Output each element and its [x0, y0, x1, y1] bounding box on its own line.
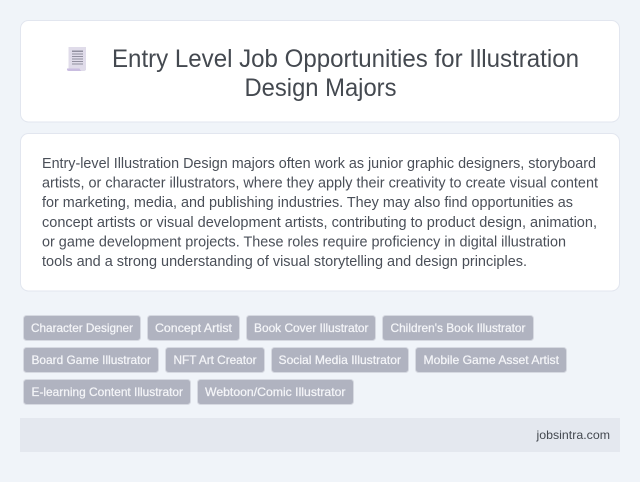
tag: Concept Artist — [148, 316, 240, 340]
description text: concept artists or visual development artists, contributing to product design, animation, — [42, 215, 597, 231]
description text — [42, 156, 598, 270]
tag: Social Media Illustrator — [272, 348, 408, 372]
tag: E-learning Content Illustrator — [24, 380, 190, 404]
tag: Book Cover Illustrator — [246, 316, 376, 340]
title — [112, 45, 579, 102]
tag: Webtoon/Comic Illustrator — [198, 380, 354, 404]
tag: Character Designer: Character Designer — [31, 321, 133, 335]
tag: Webtoon/Comic Illustrator: Webtoon/Comic Illustrator — [205, 385, 346, 399]
footer bar — [20, 418, 620, 452]
job tags — [24, 316, 566, 404]
tag: Character Designer — [24, 316, 140, 340]
tag: NFT Art Creator: NFT Art Creator — [174, 353, 256, 367]
footer source text: jobsintra.com — [535, 428, 610, 442]
description text: for marketing, media, and publishing industries. They may also find opportunities as — [42, 195, 573, 211]
tag: Children's Book Illustrator: Children's Book Illustrator — [390, 321, 526, 335]
description text: or game development projects. These roles require proficiency in digital illustration — [42, 234, 566, 250]
description text: tools and a strong understanding of visual storytelling and design principles. — [42, 254, 527, 270]
title: Design Majors — [244, 74, 396, 102]
panel: description card — [20, 134, 620, 291]
tag: Mobile Game Asset Artist: Mobile Game Asset Artist — [424, 353, 560, 367]
tag: NFT Art Creator — [166, 348, 264, 372]
tag: Social Media Illustrator: Social Media Illustrator — [278, 353, 401, 367]
tag: Board Game Illustrator: Board Game Illustrator — [32, 353, 151, 367]
description text: artists, or character illustrators, where they apply their creativity to create visual content — [42, 176, 598, 192]
icon: document scroll — [67, 47, 86, 71]
tag: Book Cover Illustrator: Book Cover Illustrator — [254, 321, 368, 335]
title: Entry Level Job Opportunities for Illustration — [112, 45, 579, 73]
tag: Board Game Illustrator — [24, 348, 158, 372]
tag: Mobile Game Asset Artist — [416, 348, 566, 372]
tag: Children's Book Illustrator — [382, 316, 534, 340]
description text: Entry-level Illustration Design majors often work as junior graphic designers, storyboard — [42, 156, 596, 172]
tag: E-learning Content Illustrator: E-learning Content Illustrator — [32, 385, 183, 399]
tag: Concept Artist: Concept Artist — [155, 321, 233, 335]
panel: header card — [20, 20, 620, 122]
